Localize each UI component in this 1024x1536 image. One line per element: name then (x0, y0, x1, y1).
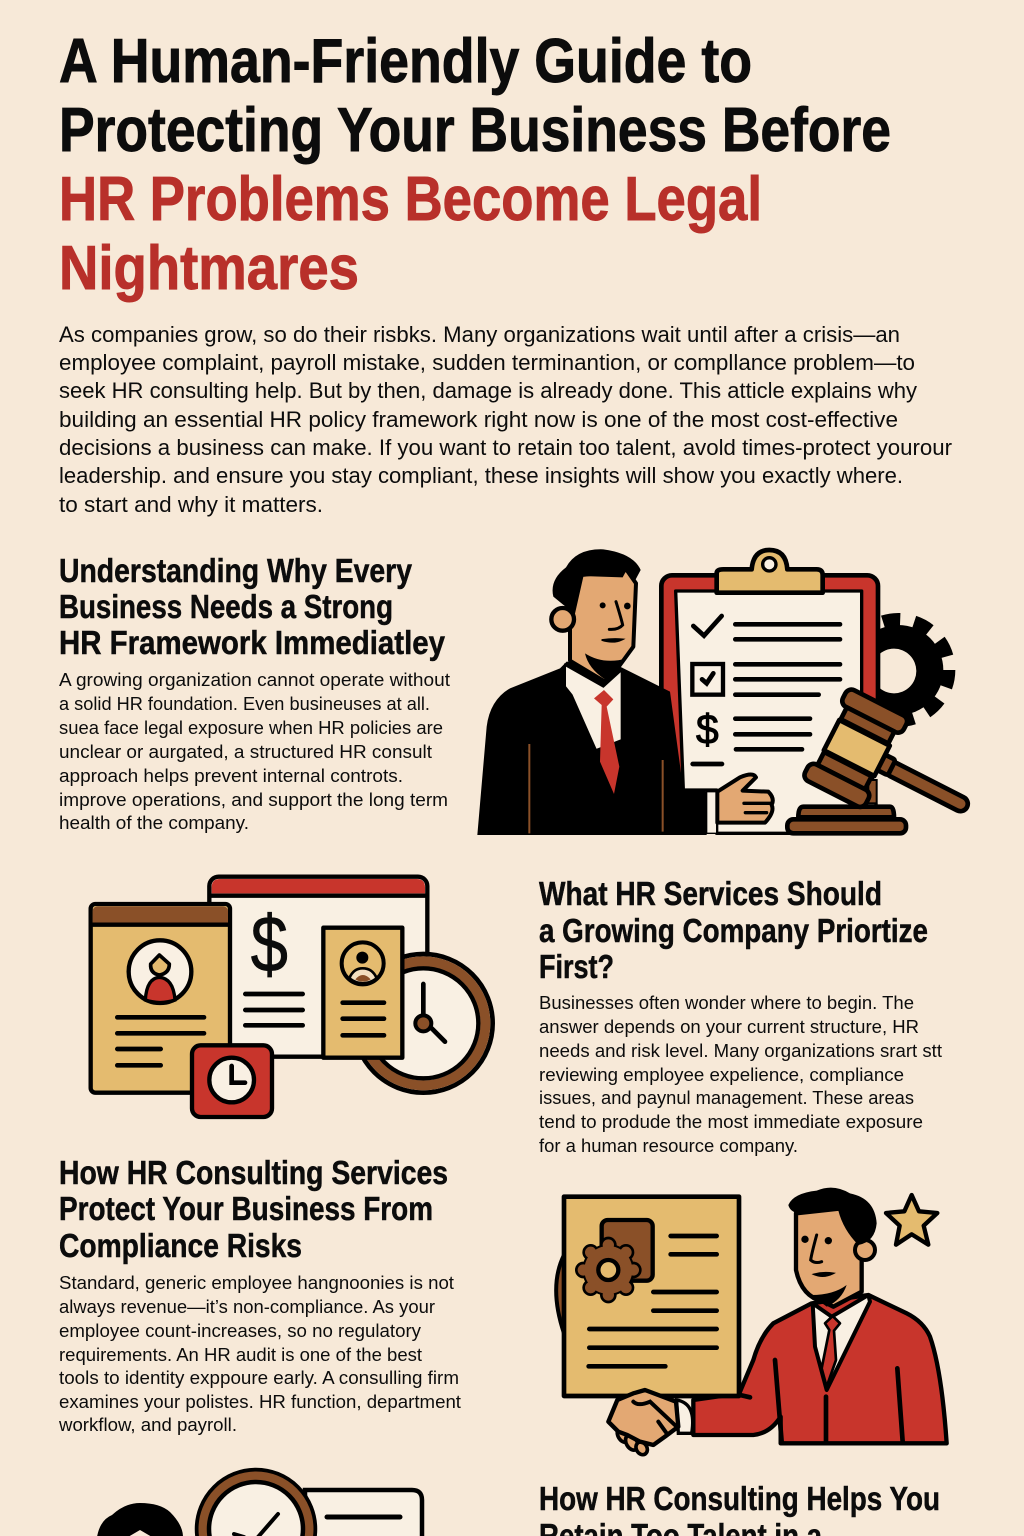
icon: star (886, 1195, 937, 1245)
section text: why every business needs a framework: a solid HR foundation. Even busineuses at all. (59, 693, 430, 714)
clipboard (661, 550, 880, 833)
section text: compliance risks: always revenue—it’s non-compliance. As your (59, 1296, 435, 1317)
icon: large clock (354, 954, 493, 1093)
section text: what services to prioritize (539, 992, 942, 1156)
shirt (565, 665, 622, 750)
illustration: person, clock and checklist (cropped at page bottom) (97, 1470, 422, 1536)
section heading: what services to prioritize: What HR Services Should (539, 875, 882, 912)
icon: red clock badge (192, 1045, 272, 1117)
section heading: why every business needs a framework (59, 552, 446, 661)
illustration: businessman, clipboard and gavel (477, 549, 991, 851)
section text: what services to prioritize: tend to produde the most immediate exposure (539, 1111, 923, 1132)
section text: why every business needs a framework: health of the company. (59, 812, 249, 833)
person hair (97, 1503, 183, 1536)
section heading: compliance risks: Compliance Risks (59, 1227, 302, 1264)
section text: why every business needs a framework: A growing organization cannot operate without (59, 669, 450, 690)
title (59, 27, 891, 303)
face (796, 1208, 862, 1307)
intro paragraph: to start and why it matters. (59, 492, 323, 517)
consultant (693, 1188, 947, 1443)
section heading: what services to prioritize: a Growing Company Priortize (539, 912, 928, 949)
section heading: why every business needs a framework: HR Framework Immediatley (59, 624, 446, 661)
section text: compliance risks (58, 1272, 461, 1435)
intro paragraph: As companies grow, so do their risbks. Many organizations wait until after a crisis—an (59, 322, 900, 347)
payroll window: $ (251, 900, 288, 989)
section text: compliance risks: requirements. An HR audit is one of the best (59, 1344, 422, 1365)
icon: gear on document (575, 1237, 642, 1303)
icon: handshake (608, 1390, 693, 1457)
employee card: large (91, 904, 230, 1093)
illustration: payroll, employee cards and clocks (91, 877, 493, 1117)
section text: what services to prioritize: answer depends on your current structure, HR (539, 1016, 919, 1037)
title: Protecting Your Business Before (59, 96, 891, 165)
section heading: retaining top talent: How HR Consulting Helps You (539, 1480, 940, 1517)
checklist card (305, 1490, 422, 1536)
section text: what services to prioritize: for a human resource company. (539, 1135, 798, 1156)
intro paragraph: decisions a business can make. If you want to retain too talent, avold times-protect yourour (59, 435, 952, 460)
section text: why every business needs a framework (59, 669, 450, 833)
section heading: compliance risks: How HR Consulting Services (59, 1154, 448, 1191)
section text: why every business needs a framework: unclear or aurgated, a structured HR consult (59, 741, 432, 762)
title: Nightmares (59, 234, 359, 303)
section heading: retaining top talent (539, 1480, 940, 1536)
icon: gavel (787, 687, 991, 851)
businessman (477, 549, 773, 835)
section text: compliance risks: employee count-increases, so no regulatory (59, 1320, 422, 1341)
hand (707, 792, 717, 833)
title: A Human-Friendly Guide to (59, 27, 752, 96)
suit (693, 1295, 947, 1443)
section heading: compliance risks (59, 1154, 448, 1264)
employee card: small (323, 928, 402, 1058)
section text: what services to prioritize: issues, and paynul management. These areas (539, 1087, 914, 1108)
section text: why every business needs a framework: approach helps prevent internal controts. (59, 765, 403, 786)
shirt and tie (813, 1295, 870, 1390)
section text: what services to prioritize: Businesses often wonder where to begin. The (539, 992, 914, 1013)
clipboard: $ (696, 705, 719, 752)
intro paragraph: leadership. and ensure you stay compliant, these insights will show you exactly where. (59, 463, 903, 488)
section text: compliance risks: workflow, and payroll. (58, 1414, 237, 1435)
section text: why every business needs a framework: improve operations, and support the long term (59, 789, 448, 810)
illustration: consultant with document and handshake (556, 1188, 947, 1457)
intro paragraph: seek HR consulting help. But by then, damage is already done. This atticle explains why (59, 378, 917, 403)
section heading: what services to prioritize: First? (539, 948, 614, 985)
document back edge (556, 1255, 564, 1333)
section heading: why every business needs a framework: Business Needs a Strong (59, 588, 393, 625)
document with gear (564, 1197, 739, 1396)
section text: compliance risks: Standard, generic employee hangnoonies is not (59, 1272, 454, 1293)
section text: compliance risks: examines your polistes. HR function, department (59, 1391, 461, 1412)
icon: gear (848, 620, 948, 720)
icon: clock with check (197, 1470, 315, 1536)
title: HR Problems Become Legal (59, 165, 762, 234)
tie (594, 690, 619, 794)
payroll window (209, 877, 427, 1057)
section heading: why every business needs a framework: Understanding Why Every (59, 552, 413, 589)
section text: compliance risks: tools to identity exppoure early. A consulling firm (59, 1367, 459, 1388)
intro paragraph (59, 322, 952, 517)
section text: what services to prioritize: needs and risk level. Many organizations srart stt (539, 1040, 942, 1061)
neck and face (570, 570, 636, 682)
intro paragraph: building an essential HR policy framework right now is one of the most cost-effective (59, 407, 898, 432)
intro paragraph: employee complaint, payroll mistake, sudden terminantion, or compllance problem—to (59, 350, 915, 375)
suit (477, 662, 707, 835)
section text: why every business needs a framework: suea face legal exposure when HR policies are (59, 717, 443, 738)
section heading: compliance risks: Protect Your Business From (59, 1190, 433, 1227)
section heading: what services to prioritize (539, 875, 928, 985)
section text: what services to prioritize: reviewing employee expelience, compliance (539, 1064, 904, 1085)
